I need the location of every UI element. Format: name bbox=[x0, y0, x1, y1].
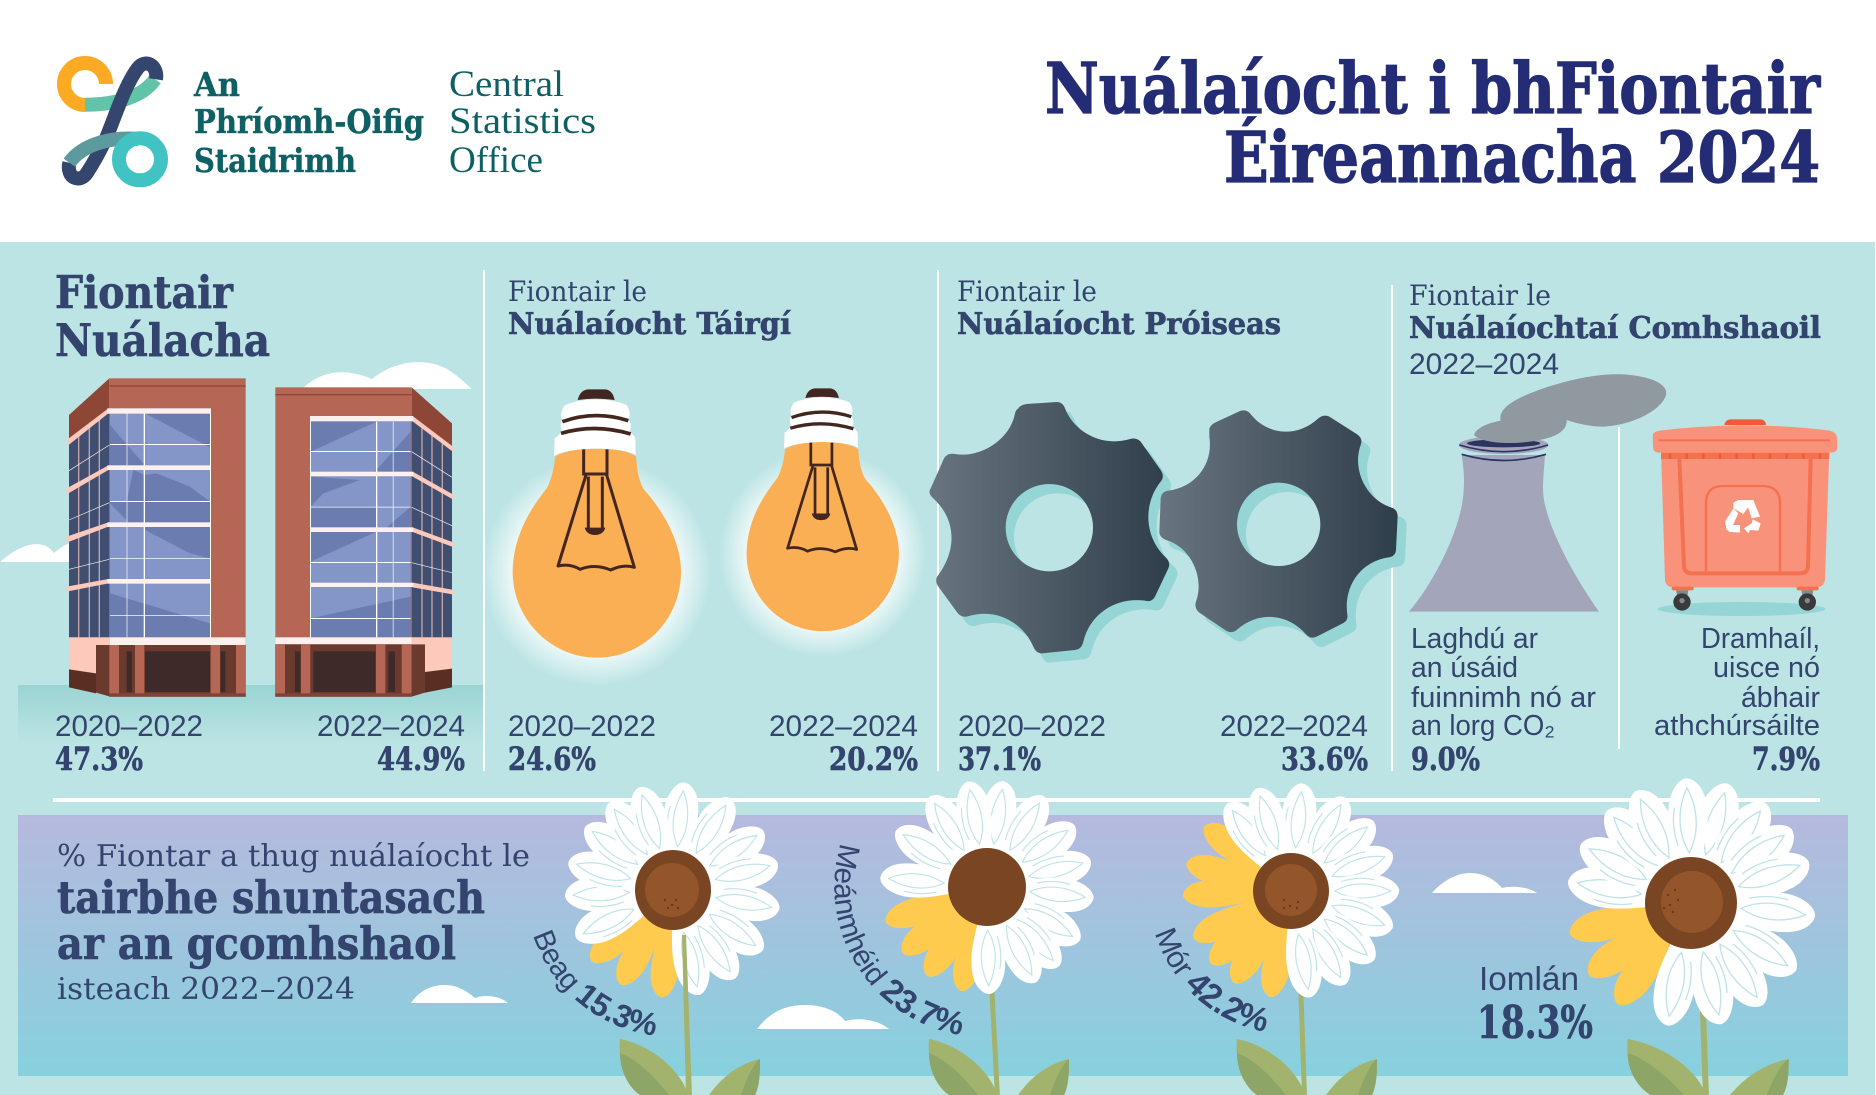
logo: Central Statistics Office bbox=[64, 63, 596, 181]
header background bbox=[0, 0, 1876, 242]
heading: Nuálaíocht Táirgí bbox=[508, 307, 792, 342]
stat 2020-2022: 2020–2022 bbox=[958, 710, 1106, 743]
logo mark bbox=[64, 63, 161, 180]
text: waste stat: athchúrsáilte bbox=[1654, 710, 1820, 742]
stat 2022-2024 bbox=[1220, 710, 1368, 778]
logo English name: Central bbox=[449, 64, 564, 105]
text: waste stat: uisce nó bbox=[1713, 652, 1820, 684]
logo English name: Statistics bbox=[449, 101, 596, 142]
curved label baselines bbox=[533, 843, 1310, 1037]
stat 2022-2024: 2022–2024 bbox=[317, 710, 465, 743]
stat 2022-2024: 2022–2024 bbox=[1220, 710, 1368, 743]
stat 2022-2024: 44.9% bbox=[377, 740, 465, 778]
clouds in sky panel bbox=[411, 873, 1537, 1029]
text: energy reduction stat bbox=[1411, 623, 1596, 778]
stat 2022-2024 bbox=[317, 710, 465, 778]
text: energy reduction stat: 9.0% bbox=[1411, 740, 1480, 778]
icon: gear 2022-2024 bbox=[1159, 410, 1407, 647]
text: waste stat: ábhair bbox=[1741, 682, 1820, 714]
heading: Fiontair le bbox=[1409, 279, 1551, 312]
text block: benefit heading bbox=[57, 839, 530, 1007]
total label: Iomlán 18.3%: Iomlán bbox=[1479, 960, 1579, 997]
text: energy reduction stat: an lorg CO₂ bbox=[1411, 710, 1555, 742]
stat 2020-2022: 37.1% bbox=[958, 740, 1041, 778]
stat 2022-2024 bbox=[769, 710, 918, 778]
main teal band bbox=[0, 242, 1875, 1095]
icon: light bulb 2022-2024 bbox=[719, 388, 927, 657]
heading: Fiontair bbox=[55, 266, 234, 319]
panel: Nuálaíochtaí Comhshaoil bbox=[1409, 279, 1837, 778]
heading: Nuálacha bbox=[55, 314, 270, 367]
logo Irish name: Staidrimh bbox=[194, 141, 356, 180]
curved label: Meánmhéid 23.7%: Meánmhéid 23.7% bbox=[834, 845, 962, 1034]
text: waste stat: Dramhaíl, bbox=[1701, 623, 1820, 655]
building 2020-2022 bbox=[67, 378, 246, 697]
logo Irish name: Phríomh-Oifig bbox=[194, 102, 424, 141]
text: waste stat: 7.9% bbox=[1752, 740, 1820, 778]
stat 2020-2022: 47.3% bbox=[55, 740, 143, 778]
title: Éireannacha 2024 bbox=[1224, 116, 1820, 199]
total label: Iomlán 18.3%: 18.3% bbox=[1477, 996, 1593, 1049]
text block: benefit heading: % Fiontar a thug nuálaíocht le bbox=[57, 839, 530, 874]
ground strip bbox=[18, 685, 483, 745]
heading bbox=[508, 275, 792, 342]
heading: Nuálaíochtaí Comhshaoil bbox=[1409, 311, 1821, 346]
text: waste stat bbox=[1654, 623, 1820, 778]
text: energy reduction stat: Laghdú ar bbox=[1411, 623, 1538, 655]
icon: recycling bin bbox=[1653, 419, 1837, 616]
total label: Iomlán 18.3% bbox=[1477, 960, 1593, 1049]
heading: 2022–2024 bbox=[1409, 348, 1559, 381]
stat 2022-2024: 2022–2024 bbox=[769, 710, 918, 743]
panel: Nuálaíocht Táirgí bbox=[482, 275, 927, 778]
section dividers bbox=[53, 270, 1820, 802]
curved label: Beag 15.3%: Beag 15.3% bbox=[534, 930, 656, 1036]
flower: Beag 15.3% bbox=[564, 781, 782, 1095]
icon: cooling tower with smoke bbox=[1409, 374, 1666, 612]
flower: Mór 42.2% bbox=[1182, 782, 1399, 1095]
curved label: Mór 42.2%: Mór 42.2% bbox=[1156, 928, 1266, 1031]
stat 2020-2022 bbox=[958, 710, 1106, 778]
icon: gear 2020-2022 bbox=[929, 402, 1178, 663]
heading: Fiontair le bbox=[957, 275, 1097, 308]
heading bbox=[957, 275, 1281, 342]
flower: Iomlán 18.3% bbox=[1565, 778, 1817, 1095]
stat 2022-2024: 33.6% bbox=[1281, 740, 1368, 778]
logo English name: Office bbox=[449, 140, 543, 181]
clouds behind buildings bbox=[0, 362, 472, 562]
flower: Meánmhéid 23.7% bbox=[879, 779, 1095, 1095]
panel: significant environmental benefit bbox=[18, 815, 1848, 1076]
logo Irish name: An bbox=[193, 65, 240, 104]
stat 2020-2022: 24.6% bbox=[508, 740, 596, 778]
stat 2020-2022: 2020–2022 bbox=[55, 710, 203, 743]
heading bbox=[55, 266, 270, 367]
text block: benefit heading: ar an gcomhshaol bbox=[57, 917, 456, 970]
icon: light bulb 2020-2022 bbox=[482, 389, 712, 687]
stat 2020-2022 bbox=[508, 710, 656, 778]
logo English name bbox=[449, 64, 596, 181]
text block: benefit heading: tairbhe shuntasach bbox=[57, 871, 485, 924]
heading: Nuálaíocht Próiseas bbox=[957, 307, 1281, 342]
text block: benefit heading: isteach 2022–2024 bbox=[57, 972, 355, 1007]
title: Nuálaíocht i bhFiontair bbox=[1045, 47, 1821, 130]
panel: Nuálaíocht Próiseas bbox=[929, 275, 1407, 778]
stat 2022-2024: 20.2% bbox=[829, 740, 918, 778]
title bbox=[1045, 47, 1821, 199]
stat 2020-2022 bbox=[55, 710, 203, 778]
stat 2020-2022: 2020–2022 bbox=[508, 710, 656, 743]
text: energy reduction stat: fuinnimh nó ar bbox=[1411, 682, 1596, 714]
text: energy reduction stat: an úsáid bbox=[1411, 652, 1518, 684]
heading bbox=[1409, 279, 1821, 381]
building 2022-2024 bbox=[275, 387, 454, 697]
heading: Fiontair le bbox=[508, 275, 647, 308]
panel: Fiontair Nuálacha bbox=[55, 266, 465, 778]
logo Irish name bbox=[193, 65, 424, 180]
